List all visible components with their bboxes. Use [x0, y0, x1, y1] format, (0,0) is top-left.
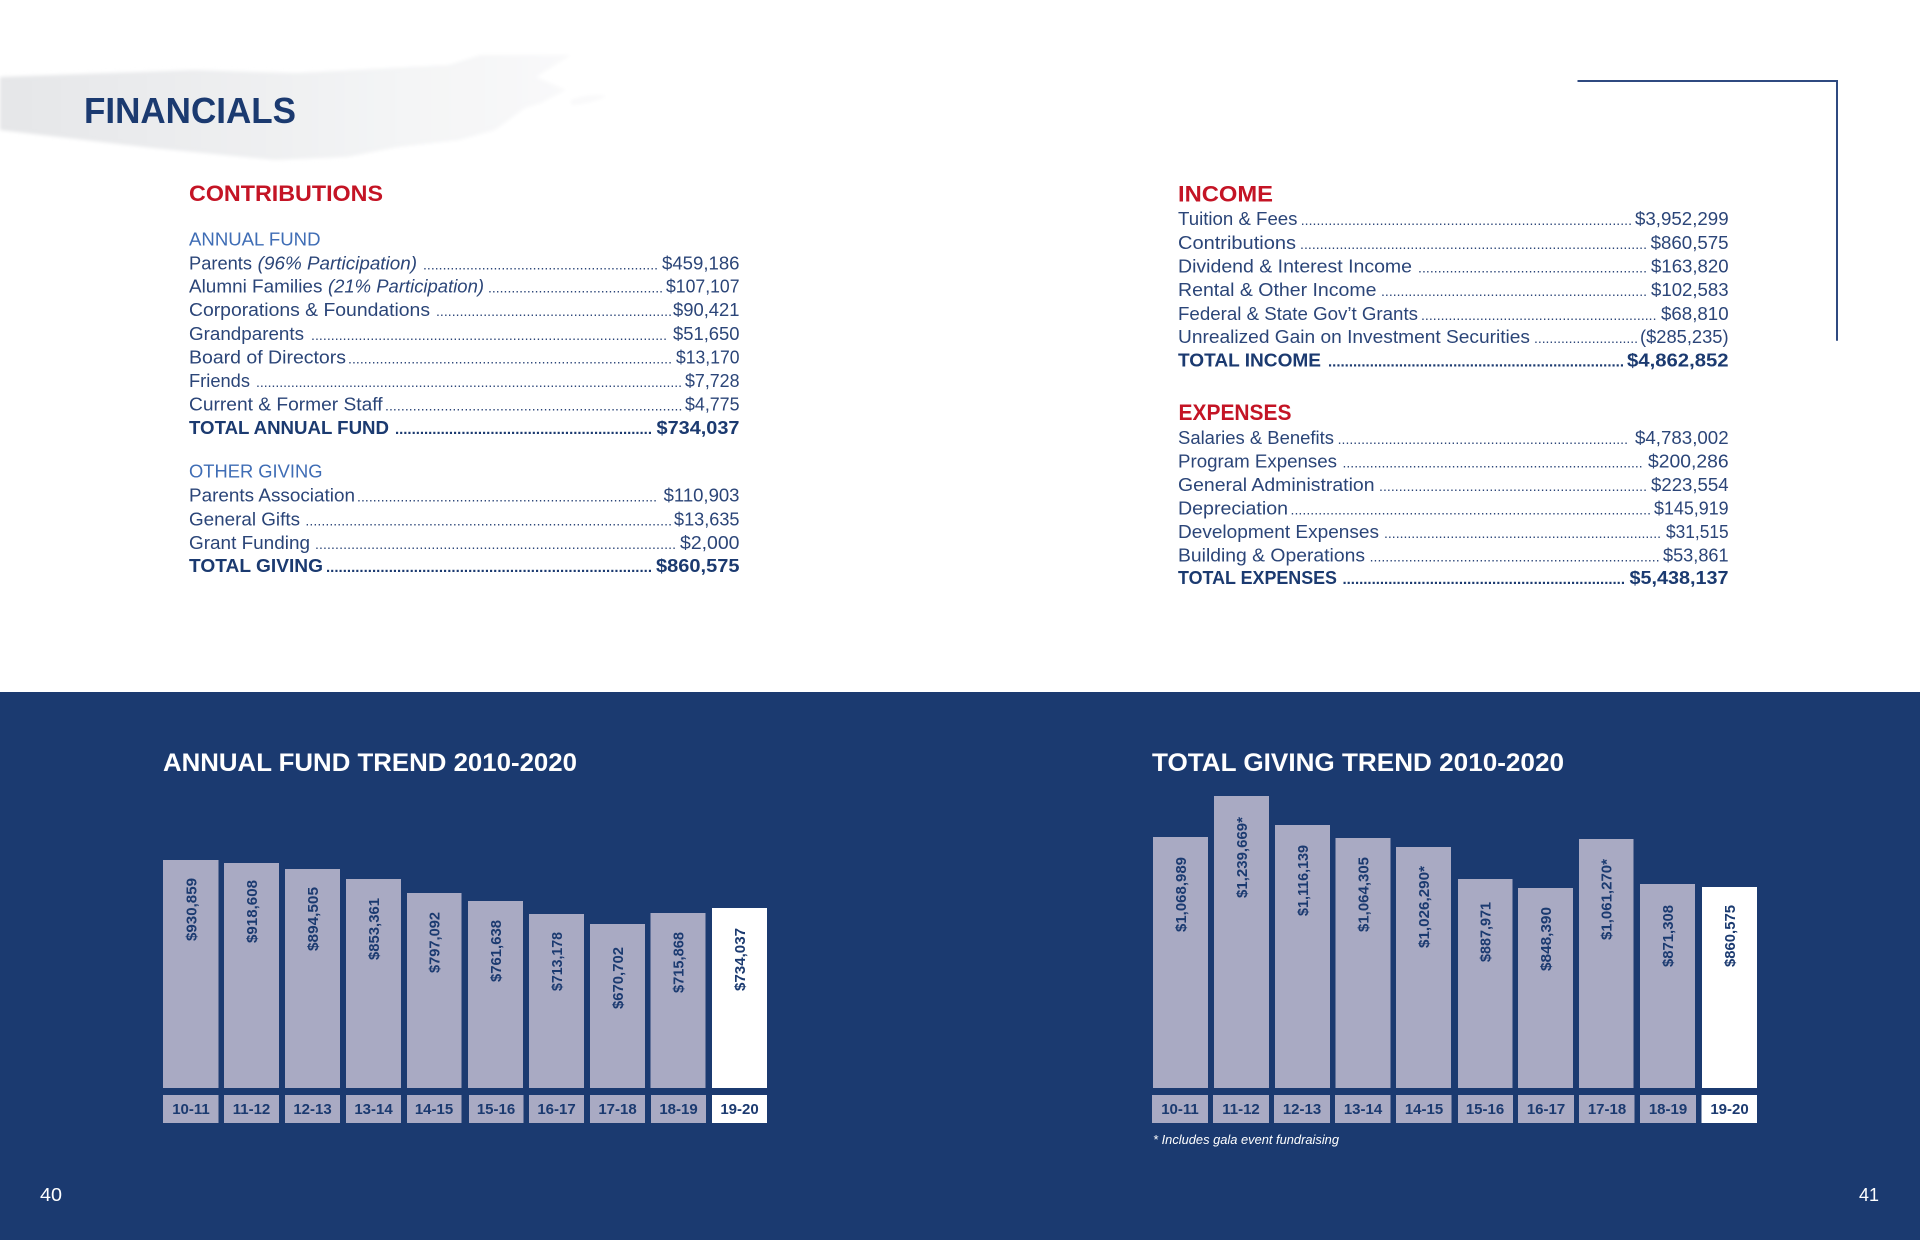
row: friends: $7,728: [685, 370, 740, 391]
row: salaries and benefits: Salaries & Benefits: [1178, 427, 1334, 448]
footnote: * Includes gala event fundraising: [1153, 1132, 1340, 1147]
row: current and former staff: $4,775: [685, 394, 740, 415]
year labels: 10-11: [172, 1101, 210, 1118]
heading: contributions: CONTRIBUTIONS: [189, 181, 383, 206]
row: total annual fund: [189, 417, 740, 438]
year labels: 19-20: [720, 1101, 759, 1118]
row: building and operations: $53,861: [1663, 545, 1729, 566]
row: parents association: Parents Association: [189, 485, 355, 506]
row: total expenses: [1178, 567, 1728, 588]
row: board of directors: ..................................................................................: [348, 351, 672, 367]
row: rental and other income: $102,583: [1651, 279, 1729, 300]
bar 13-14: [346, 879, 401, 1088]
row: total expenses: TOTAL EXPENSES: [1178, 567, 1337, 588]
row: current and former staff: [189, 394, 740, 415]
row: contributions: ........................................................................................: [1300, 236, 1647, 252]
bar 11-12: $918,608: [244, 880, 261, 943]
row: general gifts: General Gifts: [189, 508, 300, 529]
bar 13-14: $853,361: [366, 898, 383, 960]
corner bracket: [1578, 81, 1837, 341]
year labels: 15-16: [477, 1101, 515, 1118]
brush stroke behind title: [0, 55, 607, 160]
row: building and operations: Building & Operations: [1178, 545, 1365, 566]
row: parents: ............................................................: [423, 256, 658, 272]
bar 12-13: $1,116,139: [1295, 845, 1312, 916]
row: total income: TOTAL INCOME: [1178, 350, 1321, 371]
subheading: other giving: OTHER GIVING: [189, 461, 322, 482]
row: corporations and foundations: ............................................................: [436, 303, 672, 319]
year labels: 19-20: [1710, 1101, 1749, 1118]
row: total giving: ..............................................................................: [326, 559, 652, 576]
year labels: 12-13: [293, 1101, 332, 1118]
bar 19-20 highlighted: $734,037: [732, 928, 749, 991]
bar 17-18: $1,061,270*: [1598, 859, 1616, 940]
row: friends: [189, 370, 740, 391]
row: program expenses: [1178, 451, 1729, 472]
bar 15-16: [468, 901, 523, 1088]
row: alumni families: (21% Participation): [328, 276, 484, 297]
row: corporations and foundations: $90,421: [673, 299, 740, 320]
row: dividend and interest income: [1178, 256, 1729, 277]
chart: annual fund trend: [163, 749, 767, 1123]
row: grant funding: $2,000: [680, 532, 740, 553]
row: building and operations: ..........................................................................: [1370, 549, 1660, 565]
heading: total giving trend: TOTAL GIVING TREND 2010-2020: [1152, 749, 1564, 777]
year labels: 11-12: [1222, 1101, 1260, 1118]
panel: contributions: [189, 181, 740, 576]
page number right: 41: [1859, 1184, 1879, 1205]
row: parents association: ............................................................................: [357, 489, 657, 505]
row: total annual fund: $734,037: [656, 417, 740, 438]
year labels: 12-13: [1283, 1101, 1321, 1118]
row: current and former staff: Current & Former Staff: [189, 394, 383, 415]
year labels: 10-11: [1161, 1101, 1199, 1118]
bar 10-11: $1,068,989: [1173, 857, 1190, 932]
row: depreciation: Depreciation: [1178, 498, 1288, 519]
row: grandparents: ..........................................................................................: [311, 327, 667, 343]
row: dividend and interest income: ..........................................................: [1418, 260, 1647, 276]
bar 15-16: [1458, 879, 1512, 1088]
year labels: [163, 1095, 767, 1123]
heading: expenses: EXPENSES: [1178, 400, 1292, 425]
row: general administration: ....................................................................: [1379, 478, 1647, 494]
bar 18-19: [650, 913, 706, 1088]
bar 19-20 highlighted: [1702, 887, 1757, 1088]
bar 17-18: [590, 924, 645, 1088]
bar 18-19: $715,868: [670, 932, 688, 993]
row: general gifts: $13,635: [674, 508, 740, 529]
row: parents: [189, 252, 740, 273]
row: parents: (96% Participation): [258, 252, 417, 273]
row: general administration: [1178, 474, 1729, 495]
row: total giving: $860,575: [656, 555, 740, 576]
row: grandparents: [189, 323, 740, 344]
bar 18-19: $871,308: [1660, 905, 1677, 967]
row: friends: Friends: [189, 370, 250, 391]
row: contributions: [1178, 232, 1729, 253]
row: parents: $459,186: [662, 252, 740, 273]
row: rental and other income: ....................................................................: [1381, 283, 1647, 299]
row: program expenses: $200,286: [1648, 451, 1729, 472]
row: salaries and benefits: $4,783,002: [1635, 427, 1729, 448]
row: unrealized gain: [1178, 326, 1729, 347]
row: current and former staff: ...........................................................................: [385, 398, 682, 414]
row: federal and state grants: $68,810: [1661, 303, 1729, 324]
year labels: 14-15: [1405, 1101, 1443, 1118]
row: corporations and foundations: Corporations & Foundations: [189, 299, 430, 320]
row: salaries and benefits: ..........................................................................: [1338, 431, 1628, 447]
bar 12-13: $894,505: [305, 887, 322, 951]
heading: annual fund trend: ANNUAL FUND TREND 2010-2020: [163, 749, 577, 777]
row: corporations and foundations: [189, 299, 740, 320]
row: general gifts: ............................................................................................: [305, 512, 672, 528]
row: salaries and benefits: [1178, 427, 1729, 448]
bar 19-20 highlighted: $860,575: [1722, 905, 1739, 967]
panel: income: [1178, 182, 1729, 371]
row: contributions: $860,575: [1651, 232, 1729, 253]
row: rental and other income: Rental & Other Income: [1178, 279, 1376, 300]
bar 16-17: [1518, 888, 1573, 1088]
row: dividend and interest income: $163,820: [1651, 256, 1729, 277]
bar 17-18: [1579, 839, 1634, 1088]
bar 13-14: [1336, 838, 1390, 1088]
row: tuition and fees: [1178, 208, 1729, 229]
row: total income: [1178, 350, 1729, 371]
row: unrealized gain: Unrealized Gain on Investment Securities: [1178, 326, 1530, 347]
row: total annual fund: ..............................................................: [395, 421, 652, 438]
row: dividend and interest income: Dividend & Interest Income: [1178, 256, 1412, 277]
row: building and operations: [1178, 545, 1729, 566]
row: development expenses: [1178, 521, 1729, 542]
row: grant funding: ..........................................................................................: [315, 536, 676, 552]
row: total annual fund: TOTAL ANNUAL FUND: [189, 417, 389, 438]
bar 16-17: $713,178: [549, 932, 566, 991]
row: alumni families: .............................................: [488, 280, 663, 296]
row: unrealized gain: ($285,235): [1640, 326, 1729, 347]
row: total income: .......................................................................: [1328, 354, 1624, 371]
bar 10-11: [163, 860, 218, 1088]
year labels: 16-17: [537, 1101, 576, 1118]
subheading: annual fund: ANNUAL FUND: [189, 229, 320, 250]
bar 11-12: [224, 863, 279, 1088]
bar 16-17: [529, 914, 584, 1088]
row: alumni families: $107,107: [666, 276, 740, 297]
year labels: 13-14: [354, 1101, 393, 1118]
bar 11-12: $1,239,669*: [1234, 817, 1251, 898]
row: development expenses: .......................................................................: [1384, 525, 1661, 541]
row: board of directors: $13,170: [676, 347, 740, 368]
row: unrealized gain: ...........................: [1534, 330, 1638, 346]
row: general administration: $223,554: [1651, 474, 1729, 495]
bar 17-18: $670,702: [610, 947, 627, 1009]
bar 15-16: $887,971: [1478, 902, 1494, 962]
row: grandparents: Grandparents: [189, 323, 304, 344]
row: total giving: [189, 555, 740, 576]
bar 10-11: $930,859: [184, 878, 200, 941]
bar 14-15: [407, 893, 462, 1088]
row: total expenses: $5,438,137: [1630, 567, 1728, 588]
bar 14-15: [1396, 847, 1451, 1088]
row: grandparents: $51,650: [673, 323, 740, 344]
panel: expenses: [1178, 400, 1729, 588]
bar 14-15: $797,092: [426, 912, 444, 973]
year labels: 18-19: [1649, 1101, 1687, 1118]
year labels: 16-17: [1527, 1101, 1565, 1118]
bar 10-11: [1153, 837, 1208, 1088]
row: depreciation: [1178, 498, 1729, 519]
row: parents association: $110,903: [664, 485, 740, 506]
year labels: 13-14: [1344, 1101, 1383, 1118]
row: development expenses: $31,515: [1666, 521, 1729, 542]
row: total income: $4,862,852: [1627, 350, 1729, 371]
bar 16-17: $848,390: [1538, 907, 1555, 971]
bar 15-16: $761,638: [488, 920, 505, 982]
panel: navy band: [0, 692, 1920, 1240]
row: federal and state grants: ............................................................: [1421, 307, 1656, 323]
row: depreciation: $145,919: [1654, 498, 1729, 519]
bar 14-15: $1,026,290*: [1416, 866, 1433, 948]
bar 18-19: [1640, 884, 1695, 1088]
year labels: 14-15: [415, 1101, 453, 1118]
chart: total giving trend: [1152, 749, 1757, 1147]
row: parents: Parents: [189, 252, 252, 273]
row: tuition and fees: ....................................................................................: [1301, 212, 1632, 228]
row: development expenses: Development Expenses: [1178, 521, 1379, 542]
row: tuition and fees: Tuition & Fees: [1178, 208, 1298, 229]
row: friends: ..............................................................................................................: [256, 374, 682, 390]
bar 19-20 highlighted: [712, 908, 767, 1088]
row: board of directors: [189, 347, 740, 368]
heading: income: INCOME: [1178, 182, 1273, 207]
bar 12-13: [1275, 825, 1330, 1088]
row: parents association: [189, 485, 740, 506]
year labels: 11-12: [233, 1101, 270, 1118]
row: board of directors: Board of Directors: [189, 347, 346, 368]
row: grant funding: Grant Funding: [189, 532, 310, 553]
year labels: 17-18: [598, 1101, 637, 1118]
row: contributions: Contributions: [1178, 232, 1296, 253]
row: general gifts: [189, 508, 740, 529]
year labels: 18-19: [659, 1101, 698, 1118]
bar 11-12: [1214, 796, 1269, 1088]
row: federal and state grants: Federal & State Gov’t Grants: [1178, 303, 1418, 324]
title: FINANCIALS: [84, 90, 296, 131]
year labels: 17-18: [1588, 1101, 1626, 1118]
row: general administration: General Administration: [1178, 474, 1374, 495]
row: program expenses: .............................................................................: [1342, 455, 1643, 471]
row: total giving: TOTAL GIVING: [189, 555, 323, 576]
row: depreciation: ...........................................................................................: [1290, 502, 1651, 518]
year labels: 15-16: [1466, 1101, 1504, 1118]
row: federal and state grants: [1178, 303, 1729, 324]
row: alumni families: [189, 276, 740, 297]
bar 12-13: [285, 869, 340, 1088]
row: grant funding: [189, 532, 740, 553]
bar 13-14: $1,064,305: [1356, 857, 1372, 932]
row: tuition and fees: $3,952,299: [1635, 208, 1729, 229]
row: total expenses: ....................................................................: [1342, 571, 1625, 588]
row: alumni families: Alumni Families: [189, 276, 322, 297]
year labels: [1152, 1095, 1757, 1123]
page number left: 40: [40, 1184, 62, 1205]
row: rental and other income: [1178, 279, 1729, 300]
row: program expenses: Program Expenses: [1178, 451, 1337, 472]
